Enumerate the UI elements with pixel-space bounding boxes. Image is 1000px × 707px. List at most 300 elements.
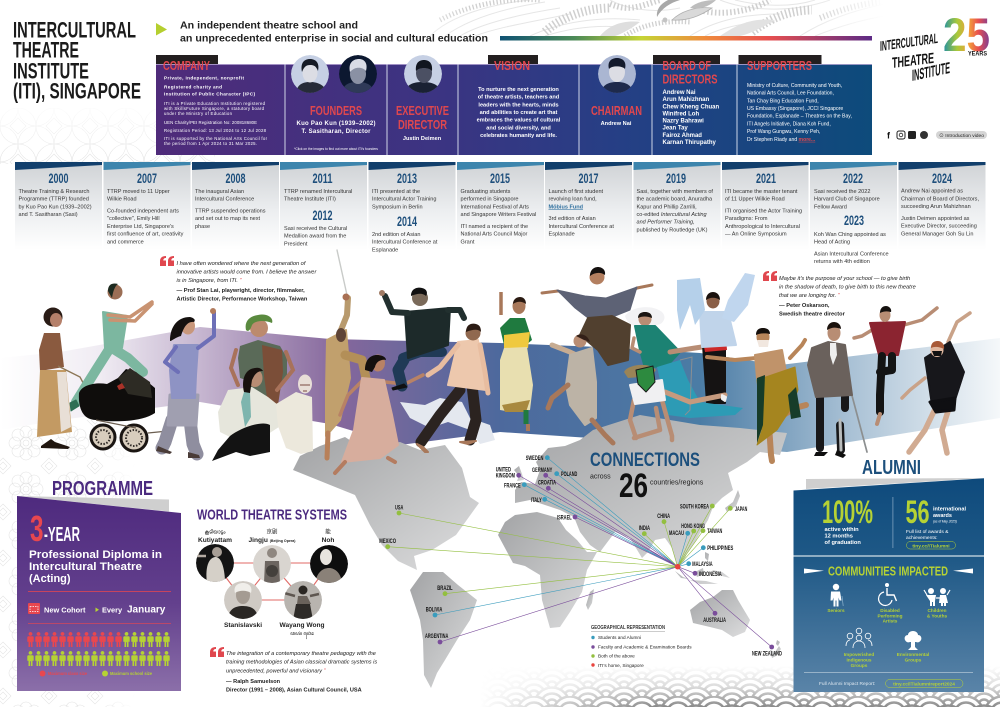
2017: Intercultural Conference at [548, 224, 614, 230]
2007: first confluence of art, creativity [107, 232, 184, 238]
chairman: CHAIRMAN [591, 103, 642, 118]
system names: 京剧 [266, 528, 278, 536]
quote: Ralph Samuelson: Director (1991 – 2008), Asian Cultural Council, USA [226, 688, 362, 694]
2021: — An Online Symposium [725, 232, 787, 238]
2015: and Singapore Writers Festival [460, 212, 536, 218]
2007: TTRP moved to 11 Upper [107, 189, 170, 195]
2011 and 2012: Medallion award from the [284, 234, 346, 240]
South America [410, 572, 477, 688]
2000: Theatre Training & Research [18, 189, 89, 195]
United Kingdom [514, 466, 524, 481]
2013 and 2014 [368, 162, 456, 253]
performers [37, 250, 970, 473]
map labels: CHINA [657, 514, 670, 520]
map labels: ITALY [531, 498, 542, 504]
colour band behind performers [0, 327, 1000, 452]
quote: Stan Lai: — Prof Stan Lai, playwright, director, filmmaker, [176, 288, 305, 294]
label: indigenous groups: Groups [851, 663, 868, 668]
vision: celebrates humanity and life. [480, 133, 557, 139]
introduction video button: ⊙ Introduction video [939, 133, 984, 138]
logo: ITI 25 years: INSTITUTE [912, 59, 950, 85]
company: under the Ministry of Education [164, 111, 233, 116]
2021: ITI organised the Actor Training [725, 208, 802, 214]
map labels: ISRAEL [557, 515, 572, 521]
quote: Peter Oskarson: in the shadow of death, to give birth to this new theatre [779, 284, 916, 290]
connections heading: across [590, 474, 611, 480]
supporters [747, 58, 852, 143]
2011 and 2012: 2011 [312, 171, 333, 186]
2024: Executive Director, succeeding [901, 224, 977, 230]
supporters: Ministry of Culture, Community and Youth, [747, 83, 842, 89]
system names: Stanislavski [224, 622, 262, 629]
connections heading: countries/regions [650, 480, 704, 486]
introduction video button [936, 131, 987, 139]
2011 and 2012: Theatre Institute (ITI) [284, 197, 336, 203]
pictogram: class and school size [27, 632, 170, 666]
vision: To nurture the next generation [478, 87, 559, 93]
vision: embraces the values of cultural [477, 118, 561, 124]
2007: Enterprise Ltd, Singapore's [107, 224, 174, 230]
2015: International Festival of Arts [460, 204, 529, 210]
company: the period from 1 Apr 2024 to 31 Mar 2025. [164, 141, 257, 146]
map labels: CROATIA [538, 480, 556, 486]
Africa [498, 512, 597, 628]
map labels: FRANCE [504, 483, 521, 489]
alumni report link: tiny.cc/ITIalumnireport2024 [893, 682, 955, 688]
2024: Chairman of Board of Directors, [901, 196, 979, 202]
performer: leaping man in kimono [542, 267, 652, 365]
map labels: BRAZIL [437, 586, 453, 592]
2019: the academic board, Anuradha [636, 197, 713, 203]
2011 and 2012 [280, 162, 367, 250]
label: disabled artists [877, 608, 903, 624]
board of directors: Fairoz Ahmad [662, 133, 702, 139]
label: environment: Groups [905, 658, 922, 662]
2024: succeeding Arun Mahizhnan [901, 204, 971, 210]
map labels: POLAND [561, 472, 578, 478]
world theatre systems [196, 506, 377, 694]
performer: dancer in black [902, 313, 970, 453]
map legend [591, 625, 692, 668]
map labels: GERMANY [532, 468, 552, 474]
map labels: TAIWAN [707, 529, 722, 535]
2015: 2015 [490, 171, 510, 186]
tagline: An independent theatre school and [180, 20, 358, 32]
title: INSTITUTE [13, 58, 89, 84]
quote: Stan Lai: is in Singapore, from ITI. ” [176, 278, 243, 284]
performer: man in peach shirt [417, 324, 488, 452]
2021: 2021 [756, 171, 776, 186]
label: children and youths: Children [927, 608, 947, 613]
2024: Justin Deimen appointed as [901, 216, 970, 222]
map labels: AUSTRALIA [703, 618, 726, 624]
2008: and set out to map its next [195, 216, 261, 222]
2019: co-edited Intercultural Acting [636, 212, 708, 218]
2022 and 2023: returns with 4th edition [814, 259, 870, 265]
2022 and 2023: 2022 [843, 171, 863, 186]
2017: Esplanade [548, 232, 575, 238]
quote: Ralph Samuelson: — Ralph Samuelson [226, 679, 281, 685]
company: ITI is supported by the National Arts Council for [164, 136, 268, 141]
social icons: f [887, 130, 891, 140]
2015: performed in Singapore [460, 197, 518, 203]
performer: pram [79, 368, 168, 451]
map labels: MACAU [669, 531, 684, 537]
board of directors: Winifred Loh [662, 112, 699, 118]
3-year [30, 508, 80, 549]
connections heading [590, 450, 704, 505]
decorative wave pattern bottom right [493, 671, 1000, 707]
map legend: ITI's home, Singapore [598, 663, 644, 668]
quote: Stan Lai: Artistic Director, Performance Workshop, Taiwan [176, 296, 308, 302]
vision: and abilities to create art that [480, 110, 557, 116]
company: with SkillsFuture Singapore, a statutory board [164, 106, 265, 111]
panel: alumni [794, 478, 984, 692]
2022 and 2023: 2023 [844, 213, 864, 228]
2013 and 2014: Symposium in Berlin [372, 204, 423, 210]
supporters: SUPPORTERS [747, 58, 812, 73]
2022 and 2023: Fellow Award [814, 204, 847, 210]
supporters: Tan Chay Bing Education Fund, [747, 98, 819, 104]
company: COMPANY [163, 58, 210, 73]
connections heading: CONNECTIONS [590, 450, 700, 471]
2022 and 2023 [810, 162, 897, 265]
icon: disabled artists [879, 583, 896, 605]
Japan [725, 490, 740, 512]
2017: 3rd edition of Asian [548, 216, 596, 222]
photo: Justin Deimen [404, 55, 442, 95]
photo: T. Sasitharan [339, 55, 377, 95]
board of directors: Nazry Bahrawi [662, 119, 704, 125]
new cohort text: January [127, 604, 166, 616]
2007: Wilkie Road [107, 197, 137, 203]
map labels: KINGDOM [496, 473, 515, 479]
map labels: SOUTH KOREA [680, 504, 709, 510]
2017: 2017 [578, 171, 598, 186]
Southeast Asian islands [675, 552, 730, 584]
map labels: MEXICO [379, 539, 396, 545]
diploma title: Intercultural Theatre [29, 561, 142, 573]
stat: 100 percent: active within [824, 527, 859, 533]
2021: Anthropological to Intercultural [725, 224, 800, 230]
board of directors: Chew Kheng Chuan [662, 104, 720, 110]
map labels: UNITED [496, 467, 511, 473]
map points [385, 455, 774, 649]
performer: woman in lilac [156, 308, 216, 458]
performer: masked crawling figure [624, 365, 726, 440]
2013 and 2014: Intercultural Actor Training [372, 197, 436, 203]
alumni report link [819, 680, 963, 688]
panel: programme [17, 496, 181, 691]
2024: General Manager Goh Su Lin [901, 231, 973, 237]
supporters: Foundation, Esplanade – Theatres on the Bay, [747, 114, 852, 120]
2015: ITI named a recipient of the [460, 224, 528, 230]
system names: Noh [322, 537, 334, 544]
performer: dancer with blue sleeves [677, 273, 755, 403]
2019: Sasi, together with members of [636, 189, 713, 195]
tagline [180, 20, 488, 44]
performer: man in gold sarong [707, 328, 806, 461]
quote: Stan Lai [160, 256, 317, 302]
programme heading: PROGRAMME [52, 478, 153, 500]
system names: Jingju (Beijing Opera) [248, 537, 296, 544]
2015: Graduating students [460, 189, 511, 195]
stat: 56 awards: tiny.cc/ITIalumni [912, 543, 950, 549]
tagline: an unprecedented enterprise in social and cultural education [180, 34, 488, 44]
2021: Paradigms: From [725, 216, 768, 222]
title: THEATRE [13, 38, 79, 62]
map labels: BOLIVIA [426, 607, 443, 613]
2015 [457, 162, 544, 250]
2008: TTRP suspended operations [195, 208, 266, 214]
decorative paisley pattern at top [430, 0, 885, 36]
system names: ꦮꦪꦁ ꦮꦺꦴꦁ [290, 631, 314, 640]
Australia [690, 590, 750, 637]
map legend: GEOGRAPHICAL REPRESENTATION [591, 625, 665, 631]
title [13, 18, 141, 104]
label: disabled artists: Performing [877, 614, 903, 618]
company: Private, independent, nonprofit [164, 75, 244, 80]
timeline [15, 162, 986, 265]
2011 and 2012: TTRP renamed Intercultural [284, 189, 352, 195]
icon: calendar [28, 603, 40, 614]
label: children and youths [927, 608, 947, 618]
Eurasia [515, 415, 787, 567]
2024 [898, 162, 986, 250]
icon: seniors [830, 584, 843, 606]
2000 [15, 162, 102, 250]
decorative overlapping-circle pattern top left [0, 117, 215, 164]
alumni report link: Full Alumni Impact Report: [819, 681, 875, 687]
2008 [192, 162, 279, 250]
stat: 100 percent: 100% [822, 494, 873, 530]
2013 and 2014: ITI presented at the [372, 189, 420, 195]
performer: man with sword [326, 250, 366, 458]
2017: Launch of first student [548, 189, 604, 195]
map labels: INDIA [639, 526, 650, 532]
vision: and social diversity, and [486, 125, 551, 131]
label: indigenous groups: Impoverished [844, 652, 874, 657]
performer: man with suit and crutch [808, 322, 867, 458]
system names: Wayang Wong [279, 622, 325, 629]
quote: Peter Oskarson: — Peter Oskarson, [779, 303, 830, 309]
2015: Grant [460, 239, 475, 245]
board of directors: Karnan Thirupathy [662, 140, 717, 146]
quote: Stan Lai: I have often wondered where the next generation of [176, 261, 307, 267]
2019: and Performer Training, [636, 220, 695, 226]
executive director: EXECUTIVE [396, 103, 449, 118]
2019: Kapur and Phillip Zarrilli, [636, 204, 697, 210]
2022 and 2023: Sasi received the 2022 [814, 189, 870, 195]
vision: leaders with the hearts, minds [478, 102, 559, 108]
label: indigenous groups [844, 652, 874, 668]
3-year: 3 [30, 508, 44, 549]
performer: woman in pink dress [335, 354, 423, 473]
executive director: DIRECTOR [398, 117, 447, 132]
quote: Peter Oskarson: that we are longing for. ” [779, 293, 841, 299]
chairman: Andrew Nai [601, 121, 632, 127]
new cohort text: New Cohort [44, 606, 86, 614]
map labels: USA [395, 505, 404, 511]
stat: 56 awards: awards [933, 513, 952, 519]
2024: 2024 [932, 171, 952, 186]
performer: woman in yellow sari [500, 292, 533, 431]
2013 and 2014: 2nd edition of Asian [372, 232, 420, 238]
label: environment [897, 652, 929, 662]
portrait: Kutiyattam [196, 544, 234, 583]
connections heading: 26 [619, 467, 648, 505]
stat: 56 awards [906, 494, 966, 549]
stat: 100 percent: of graduation [824, 540, 861, 546]
2007: Co-founded independent arts [107, 208, 179, 214]
pictogram legend [40, 670, 153, 676]
founders: Kuo Pao Kun (1939–2002) [296, 121, 376, 127]
2015: National Arts Council Major [460, 232, 528, 238]
2000: 2000 [48, 171, 68, 186]
company: UEN Charity/PEI Registration No: 200818680E [164, 120, 257, 125]
New Zealand [770, 640, 781, 658]
2011 and 2012: President [284, 241, 308, 247]
performer: teal cloth and shopping cart [657, 357, 743, 418]
stat: 100 percent [822, 494, 873, 546]
map labels: SWEDEN [526, 456, 543, 462]
label: disabled artists: Disabled [880, 608, 900, 613]
map labels: JAPAN [735, 507, 747, 513]
icon: environment [905, 631, 921, 650]
performer: man in black jacket [379, 288, 464, 390]
map labels [379, 456, 782, 658]
communities impacted heading: COMMUNITIES IMPACTED [828, 564, 948, 578]
connection lines [388, 458, 772, 647]
photo: Andrew Nai [598, 55, 636, 95]
performer: figure in white hat and teal [625, 307, 716, 368]
founders: T. Sasitharan, Director [302, 129, 371, 135]
2011 and 2012: Sasi received the Cultural [284, 226, 347, 232]
2008: phase [195, 224, 210, 230]
map labels: PHILIPPINES [707, 546, 733, 552]
map labels: INDONESIA [699, 572, 722, 578]
North America [293, 437, 479, 570]
vision: of theatre artists, teachers and [478, 95, 560, 101]
portrait: Wayang Wong [284, 581, 322, 620]
new cohort text [44, 604, 166, 616]
company: ITI is a Private Education Institution registered [164, 101, 266, 106]
diploma title: (Acting) [29, 573, 71, 585]
company: Registration Period: 13 Jul 2024 to 12 Jul 2028 [164, 128, 267, 133]
quote: Ralph Samuelson: The integration of a contemporary theatre pedagogy with the [226, 651, 376, 657]
executive director: Justin Deimen [403, 136, 442, 142]
quote: Ralph Samuelson [210, 647, 377, 694]
heading: WORLD THEATRE SYSTEMS [197, 506, 347, 524]
quote: Ralph Samuelson: unprecedented, powerful and visionary ” [226, 668, 327, 674]
panel: organisation overview [156, 55, 872, 155]
logo: ITI 25 years: YEARS [968, 52, 987, 58]
board of directors: Arun Mahizhnan [662, 97, 709, 103]
2013 and 2014: Intercultural Conference at [372, 240, 438, 246]
2017 [545, 162, 632, 250]
supporters: US Embassy (Singapore), JCCI Singapore [747, 106, 843, 112]
quote: Peter Oskarson: Swedish theatre director [779, 312, 846, 318]
company: Institution of Public Character (IPC) [164, 92, 255, 96]
quote: Stan Lai: innovative artists would come from. I believe the answer [176, 270, 317, 276]
board of directors: Andrew Nai [662, 90, 696, 96]
2022 and 2023: Head of Acting [814, 240, 850, 246]
2013 and 2014: Esplanade [372, 247, 398, 253]
map labels: NEW ZEALAND [752, 652, 782, 658]
system names: Kutiyattam [198, 537, 232, 544]
2021: of 11 Upper Wilkie Road [725, 197, 785, 203]
icon: indigenous groups [846, 628, 872, 648]
board of directors: DIRECTORS [662, 72, 718, 86]
executive director [396, 103, 449, 142]
founders: *Click on the images to find out more about ITI's founders [294, 147, 378, 151]
2019: published by Routledge (UK) [636, 227, 708, 233]
2021 [722, 162, 808, 250]
system names [198, 528, 334, 640]
stat: 56 awards: (as of May 2025) [933, 520, 957, 524]
supporters: ITI Angels Initiative, Diana Koh Fund, [747, 121, 831, 127]
performer: man in teal [70, 284, 152, 411]
quote: Peter Oskarson: Maybe it's the purpose of your school — to give birth [779, 276, 910, 282]
map legend: Students and Alumni [598, 635, 641, 640]
performer: crouching figure in beige [548, 334, 613, 443]
portrait: Jingju [253, 545, 291, 583]
2008: The inaugural Asian [195, 189, 244, 195]
system names: കൂടിയാട്ടം [205, 528, 226, 536]
social icons [887, 130, 928, 140]
new cohort text: Every [102, 606, 123, 614]
Madagascar [586, 589, 594, 610]
stat: 56 awards: achievements: [906, 535, 938, 541]
2017: revolving loan fund, [548, 197, 597, 203]
alumni heading: ALUMNI [862, 457, 921, 479]
2007: and commerce [107, 239, 144, 245]
chairman [591, 103, 642, 127]
2007: 2007 [137, 171, 157, 186]
company: Registered charity and [164, 84, 222, 90]
supporters: Dr Stephen Riady and more... [747, 137, 816, 143]
2000: by Kuo Pao Kun (1939–2002) [18, 204, 92, 210]
stat: 100 percent: 12 months [824, 534, 853, 540]
2007: "collective", Emily Hill [107, 216, 160, 222]
photo: Kuo Pao Kun [291, 55, 329, 95]
Greenland and Arctic islands [400, 398, 495, 444]
label: seniors: Seniors [827, 608, 845, 613]
2022 and 2023: Harvard Club of Singapore [814, 197, 880, 203]
map legend: Both of the above [598, 654, 635, 659]
logo: ITI 25 years: THEATRE [892, 50, 934, 72]
founders [294, 103, 378, 151]
pictogram legend: Maximum class size [48, 671, 88, 676]
quote: Peter Oskarson [763, 271, 916, 318]
supporters: National Arts Council, Lee Foundation, [747, 91, 834, 97]
diploma title [29, 549, 162, 585]
label: environment: Environmental [897, 652, 929, 657]
stat: 56 awards: Full list of awards & [906, 529, 949, 535]
2013 and 2014: 2013 [397, 171, 417, 186]
performer: man with leaf crown [231, 315, 293, 405]
map legend: Faculty and Academic & Examination Boards [598, 644, 692, 650]
label: children and youths: & Youths [927, 614, 947, 618]
2008: Intercultural Conference [195, 197, 254, 203]
rainbow bar [500, 36, 872, 40]
2019 [634, 162, 720, 250]
label: disabled artists: Artists [883, 619, 898, 624]
map labels: ARGENTINA [425, 634, 449, 640]
2011 and 2012: 2012 [312, 208, 332, 223]
title: INTERCULTURAL [13, 18, 136, 42]
board of directors: Jean Tay [662, 126, 688, 132]
